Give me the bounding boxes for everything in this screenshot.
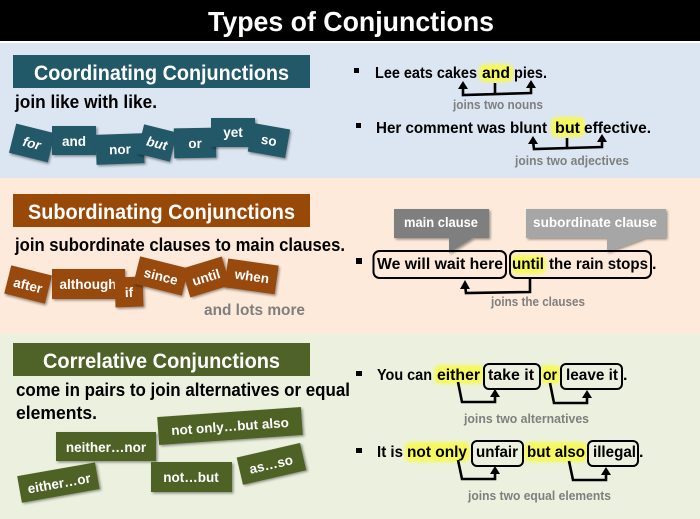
example: but: Her comment was blunt — [376, 120, 548, 137]
heading: coordinating — [13, 55, 310, 88]
example: not only but also: joins two equal elements — [467, 489, 611, 503]
example: but: joins two adjectives — [514, 154, 629, 168]
heading: subordinating: Subordinating Conjunctions — [28, 201, 295, 224]
example: either or: leave it — [566, 367, 619, 384]
example: not only but also: illegal — [593, 444, 636, 461]
word tags: correlative: not…but — [163, 470, 219, 485]
description: correlative: come in pairs to join alternatives or equal — [16, 380, 350, 400]
example: until: We will wait here — [377, 256, 503, 273]
example: until: until — [512, 256, 544, 273]
word tags: coordinating: and — [62, 134, 86, 149]
word tags: subordinating: when — [233, 267, 270, 286]
word tags: subordinating: although — [60, 277, 116, 292]
description: correlative — [16, 380, 350, 423]
panel: subordinating conjunctions — [0, 178, 700, 334]
word tags: coordinating: nor — [109, 142, 132, 157]
example: and — [354, 64, 547, 112]
example: and: pies. — [514, 65, 547, 82]
example: and: joins two nouns — [452, 98, 543, 112]
description: correlative: elements. — [16, 403, 97, 423]
heading: correlative — [13, 343, 310, 376]
heading: subordinating — [13, 194, 310, 227]
callout: subordinate clause: subordinate clause — [533, 215, 657, 230]
heading: correlative: Correlative Conjunctions — [43, 350, 280, 373]
word tags: correlative: either…or — [26, 470, 93, 496]
example: not only but also — [356, 441, 643, 503]
word tags: subordinating: until — [190, 266, 222, 289]
example: until: joins the clauses — [490, 295, 585, 309]
example: but: effective. — [584, 120, 651, 137]
word tags: subordinating — [4, 256, 279, 307]
example: not only but also: not only — [407, 444, 467, 461]
word tags: correlative: as…so — [248, 452, 294, 477]
word tags: subordinating: since — [142, 265, 180, 288]
panel: correlative conjunctions — [0, 334, 700, 519]
description: coordinating: join like with like. — [14, 92, 157, 112]
word tags: coordinating: yet — [223, 125, 243, 140]
word tags: correlative: not only…but also — [171, 415, 289, 438]
example: either or: take it — [488, 367, 535, 384]
example: but: but — [555, 120, 581, 137]
example: not only but also: but also — [527, 444, 585, 461]
word tags: subordinating: after — [12, 275, 45, 296]
example: either or: . — [623, 367, 627, 384]
example: either or — [356, 364, 627, 426]
example: and: Lee eats cakes — [375, 65, 477, 82]
panel: coordinating conjunctions — [0, 43, 700, 178]
word tags: correlative — [17, 407, 306, 503]
callout: main clause: main clause — [404, 215, 478, 230]
example: until: the rain stops — [549, 256, 648, 273]
example: either or: either — [437, 367, 480, 384]
example: either or: or — [543, 367, 557, 384]
callout: subordinate clause — [526, 209, 666, 252]
word tags: coordinating: so — [260, 132, 278, 149]
title — [0, 0, 700, 41]
heading: coordinating: Coordinating Conjunctions — [34, 62, 289, 85]
note: and lots more: and lots more — [204, 302, 305, 319]
example: until: . — [652, 256, 656, 273]
example: but — [356, 117, 651, 168]
example: until — [356, 251, 656, 309]
example: not only but also: It is — [377, 444, 403, 461]
example: and: and — [482, 65, 510, 82]
example: not only but also: . — [639, 444, 643, 461]
callout: main clause — [394, 209, 489, 253]
description: subordinating: join subordinate clauses to main clauses. — [14, 235, 345, 255]
word tags: coordinating: for — [21, 134, 43, 153]
example: not only but also: unfair — [476, 444, 518, 461]
example: either or: You can — [377, 367, 432, 384]
title: Types of Conjunctions — [208, 6, 494, 37]
word tags: subordinating: if — [125, 285, 134, 300]
example: either or: joins two alternatives — [463, 412, 589, 426]
word tags: coordinating — [9, 118, 290, 165]
word tags: correlative: neither…nor — [66, 440, 147, 455]
word tags: coordinating: but — [145, 134, 169, 153]
word tags: coordinating: or — [188, 136, 203, 151]
